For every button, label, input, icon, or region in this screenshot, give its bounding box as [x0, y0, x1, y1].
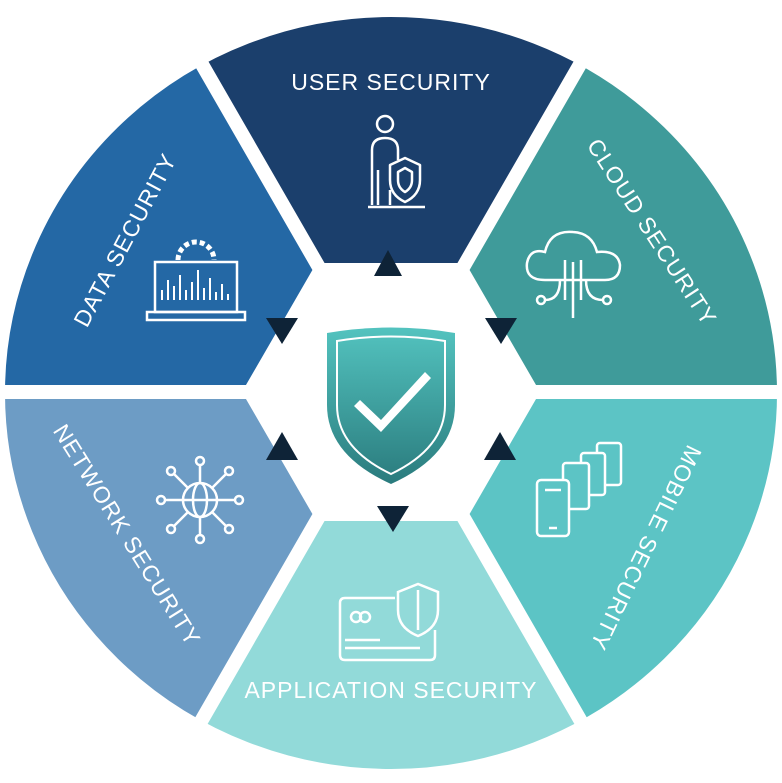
- panel: data security: [5, 68, 312, 385]
- icon: user with shield: [368, 116, 425, 207]
- panel: cloud security: [470, 68, 777, 385]
- panel: application security: [208, 521, 574, 769]
- icon: laptop with gear: [147, 242, 245, 320]
- heading: cloud security: CLOUD SECURITY: [582, 134, 722, 330]
- heading: application security: APPLICATION SECURITY: [244, 677, 538, 703]
- icon: cloud: [527, 232, 620, 318]
- icon: card with shield: [340, 584, 438, 660]
- icon: center shield with check: [327, 328, 455, 484]
- heading: network security: NETWORK SECURITY: [48, 419, 206, 651]
- panel: network security: [5, 399, 312, 718]
- heading: data security: DATA SECURITY: [68, 149, 182, 331]
- heading: user security: USER SECURITY: [291, 69, 491, 95]
- arrows: triangles: [266, 250, 517, 532]
- heading: mobile security: MOBILE SECURITY: [585, 441, 707, 655]
- panel: mobile security: [470, 399, 777, 718]
- icon: mobile phones: [537, 443, 621, 536]
- panel: user security: [208, 17, 574, 263]
- icon: network globe: [157, 457, 243, 543]
